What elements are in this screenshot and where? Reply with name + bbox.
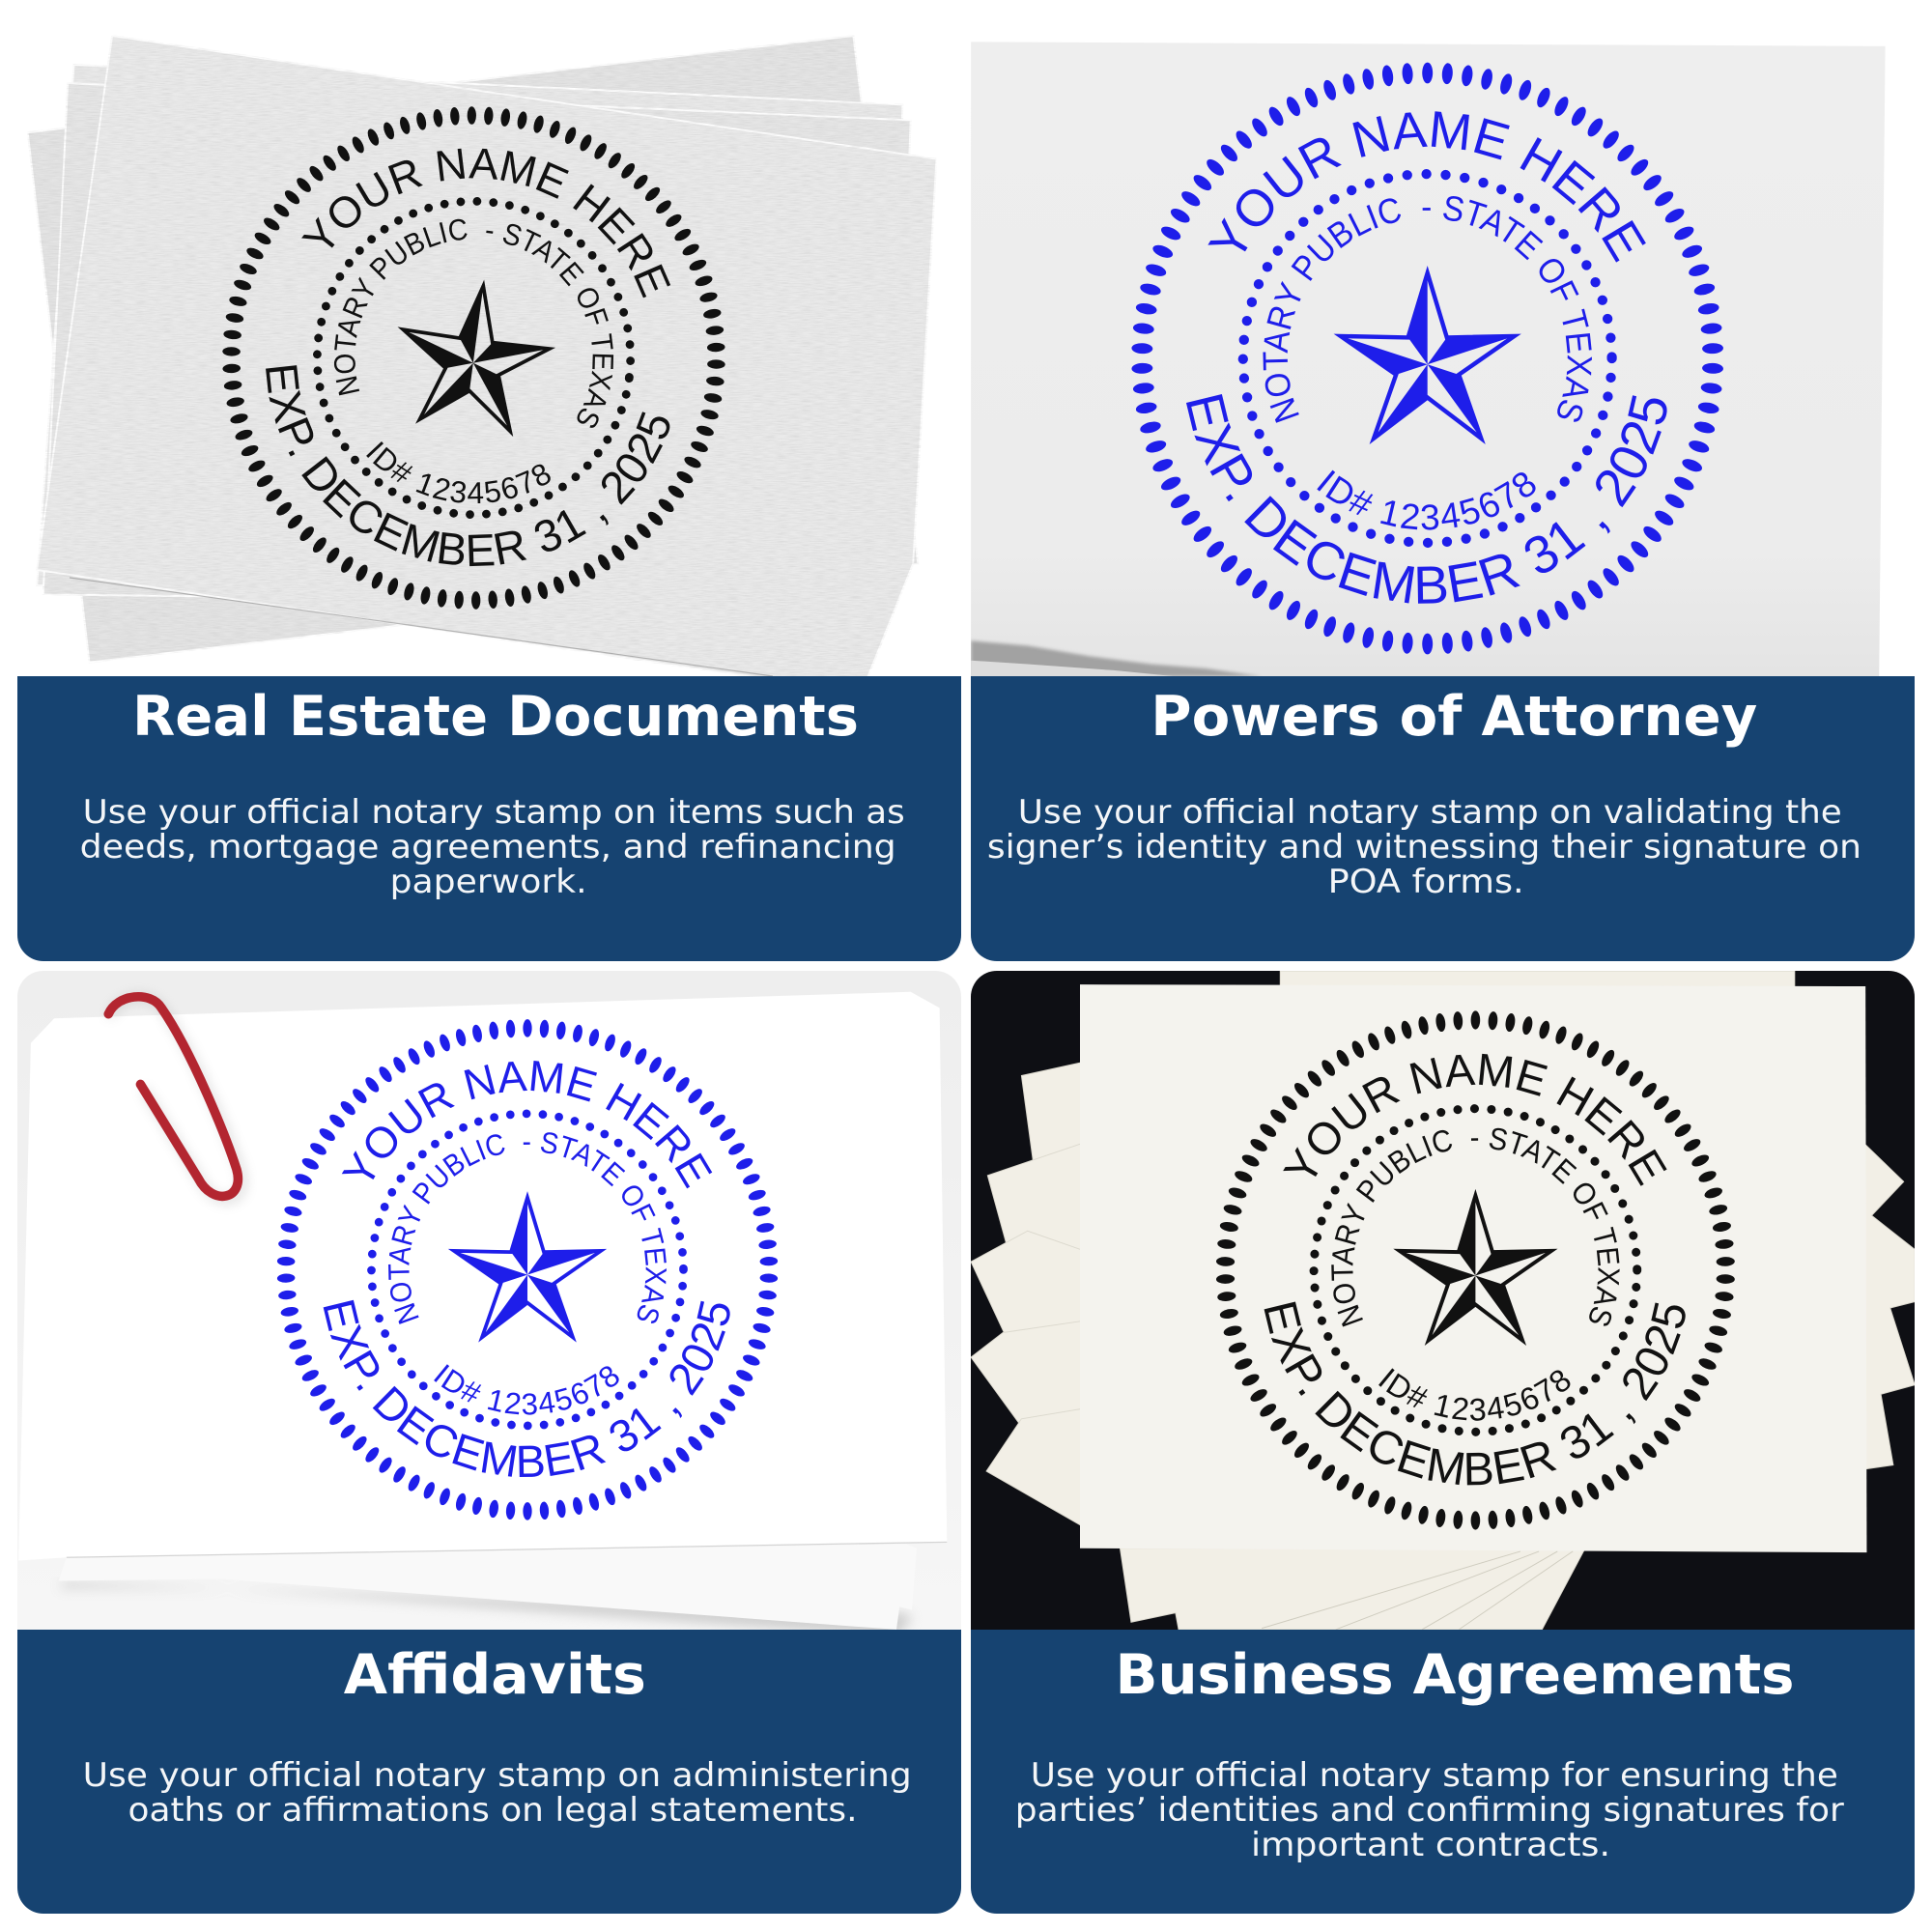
body text: parties’ identities and confirming signatures for xyxy=(1015,1791,1844,1830)
body text: signer’s identity and witnessing their signature on xyxy=(987,828,1861,867)
stamp: blue Texas notary seal: NOTARY PUBLIC - STATE OF TEXAS xyxy=(1263,196,1592,423)
stamp: black Texas notary seal xyxy=(222,106,725,610)
body text: Use your official notary stamp on validating the xyxy=(1018,793,1842,832)
stamp: blue Texas notary seal: ID# 12345678 xyxy=(434,1364,619,1415)
stamp: blue Texas notary seal: ID# 12345678 xyxy=(1317,469,1536,530)
body text: Use your official notary stamp on items such as xyxy=(83,793,905,832)
stamp: black Texas notary seal: EXP. DECEMBER 31 , 2025 xyxy=(1264,1302,1686,1486)
stamp: black Texas notary seal xyxy=(1216,1010,1735,1530)
body text: oaths or affirmations on legal statements. xyxy=(128,1791,857,1830)
panel: Affidavits xyxy=(17,971,961,1914)
stamp: blue Texas notary seal: YOUR NAME HERE xyxy=(342,1061,713,1188)
stamp: blue Texas notary seal: NOTARY PUBLIC - STATE OF TEXAS xyxy=(388,1132,667,1324)
heading: Business Agreements xyxy=(1115,1643,1795,1707)
stamp: black Texas notary seal: YOUR NAME HERE xyxy=(1283,1053,1667,1186)
stamp: black Texas notary seal: EXP. DECEMBER 31 , 2025 xyxy=(266,365,670,566)
stamp: blue Texas notary seal: YOUR NAME HERE xyxy=(1208,111,1646,263)
stamp: blue Texas notary seal: EXP. DECEMBER 31 , 2025 xyxy=(1186,394,1667,604)
body text xyxy=(83,1756,912,1830)
heading: Real Estate Documents xyxy=(132,685,859,749)
panel: Real Estate Documents xyxy=(17,35,961,961)
stamp: blue Texas notary seal: EXP. DECEMBER 31 , 2025 xyxy=(323,1300,730,1477)
panel: Business Agreements xyxy=(971,971,1915,1914)
photo: torn paper sheet xyxy=(971,17,1915,961)
body text: Use your official notary stamp on administering xyxy=(83,1756,912,1795)
panel: Powers of Attorney xyxy=(971,43,1915,961)
heading: Affidavits xyxy=(344,1643,646,1707)
stamp: blue Texas notary seal xyxy=(1131,62,1723,655)
photo: textured paper stack xyxy=(17,17,961,961)
icon: red paperclip xyxy=(108,997,242,1200)
photo: white card stack with paperclip xyxy=(17,971,961,1914)
body text: POA forms. xyxy=(1328,863,1524,901)
stamp: black Texas notary seal: NOTARY PUBLIC - STATE OF TEXAS xyxy=(1331,1128,1620,1327)
stamp: black Texas notary seal: NOTARY PUBLIC - STATE OF TEXAS xyxy=(334,218,614,428)
photo: cream cards fanned on black xyxy=(971,971,1915,1914)
body text: deeds, mortgage agreements, and refinancing xyxy=(80,828,896,867)
body text: important contracts. xyxy=(1251,1826,1610,1864)
body text: paperwork. xyxy=(390,863,587,901)
stamp: black Texas notary seal: ID# 12345678 xyxy=(1378,1368,1571,1421)
heading: Powers of Attorney xyxy=(1151,685,1757,749)
body text xyxy=(987,793,1861,901)
stamp: blue Texas notary seal xyxy=(276,1019,779,1520)
stamp: black Texas notary seal: YOUR NAME HERE xyxy=(301,149,670,298)
stamp: black Texas notary seal: ID# 12345678 xyxy=(366,441,551,503)
body text xyxy=(1015,1756,1844,1864)
body text xyxy=(80,793,905,901)
body text: Use your official notary stamp for ensuring the xyxy=(1031,1756,1838,1795)
